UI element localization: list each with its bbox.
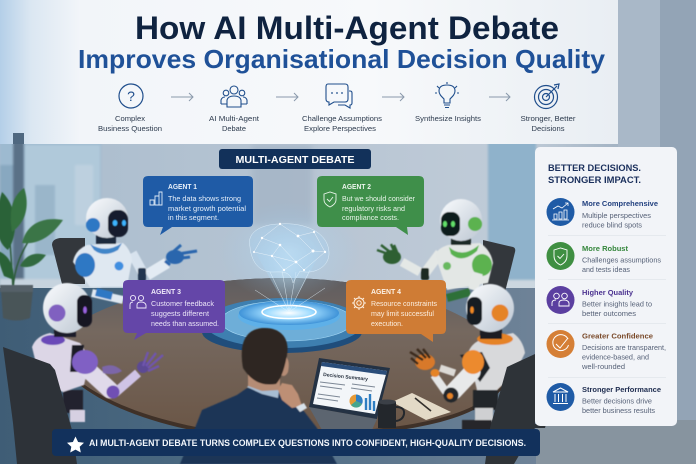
panel: better decisions bbox=[535, 147, 677, 426]
step 5: stronger decisions: Stronger, Better bbox=[520, 114, 576, 123]
callout: agent 4: Resource constraints bbox=[371, 299, 437, 308]
step 3: challenge assumptions bbox=[302, 84, 382, 133]
panel heading: BETTER DECISIONS. bbox=[548, 163, 641, 173]
projector disc bbox=[202, 298, 363, 353]
plant bbox=[0, 188, 63, 320]
callout: agent 1: market growth potential bbox=[168, 204, 246, 213]
step 2: multi-agent debate: AI Multi-Agent bbox=[209, 114, 260, 123]
callout: agent 2 bbox=[317, 176, 424, 235]
chair: agent 1 bbox=[52, 238, 85, 284]
icon: star bbox=[67, 436, 84, 452]
benefit: stronger performance bbox=[546, 383, 661, 415]
step 5: stronger decisions: Decisions bbox=[532, 124, 565, 133]
benefit: higher quality bbox=[546, 286, 652, 318]
robot: agent 1 blue bbox=[73, 198, 197, 300]
callout: agent 2: compliance costs. bbox=[342, 213, 399, 222]
benefit: more comprehensive: More Comprehensive bbox=[582, 199, 658, 208]
benefit: greater confidence: Decisions are transparent, bbox=[582, 343, 666, 352]
callout: agent 3: suggests different bbox=[151, 309, 210, 318]
hologram: brain and projector bbox=[202, 202, 363, 353]
callout: agent 2: But we should consider bbox=[342, 194, 415, 203]
step 4: synthesize insights: Synthesize Insights bbox=[415, 114, 481, 123]
laptop: decision summary bbox=[309, 358, 390, 430]
robot: agent 4 orange bbox=[410, 284, 525, 432]
step 4: synthesize insights bbox=[415, 82, 481, 123]
heading pill: multi-agent debate: MULTI-AGENT DEBATE bbox=[236, 154, 354, 166]
right wall bbox=[618, 0, 696, 464]
benefit: more robust: Challenges assumptions bbox=[582, 256, 661, 264]
notebook and pen bbox=[392, 393, 451, 420]
callout: agent 4: AGENT 4 bbox=[371, 287, 402, 296]
chair: agent 3 bbox=[3, 347, 77, 464]
benefit: more robust: and tests ideas bbox=[582, 265, 630, 274]
benefit: greater confidence: evidence-based, and bbox=[582, 352, 649, 362]
benefit: more comprehensive: Multiple perspectives bbox=[582, 211, 651, 220]
benefit: stronger performance: Stronger Performance bbox=[582, 385, 661, 394]
floor bbox=[0, 288, 540, 464]
left window bbox=[0, 130, 101, 290]
icon: people bbox=[130, 295, 146, 309]
callout: agent 4: may limit successful bbox=[371, 309, 434, 318]
step 1: complex business question: ? bbox=[127, 88, 135, 104]
callout: agent 1: The data shows strong bbox=[168, 194, 241, 203]
bottom banner bbox=[52, 429, 540, 456]
callout: agent 1 bbox=[143, 176, 253, 235]
step 2: multi-agent debate: Debate bbox=[222, 124, 246, 133]
benefit: higher quality: better outcomes bbox=[582, 309, 636, 318]
benefit: higher quality: Higher Quality bbox=[582, 288, 634, 297]
brain network bbox=[249, 223, 329, 283]
step 3: challenge assumptions: Explore Perspectives bbox=[304, 124, 376, 133]
step 1: complex business question: Complex bbox=[115, 114, 145, 123]
callout: agent 2: regulatory risks and bbox=[342, 204, 405, 213]
callout: agent 2: AGENT 2 bbox=[342, 182, 371, 191]
title: Improves Organisational Decision Quality bbox=[78, 44, 606, 74]
arrow 1 bbox=[171, 93, 193, 101]
benefit: greater confidence: well-rounded bbox=[581, 362, 625, 371]
benefit: greater confidence: Greater Confidence bbox=[582, 332, 653, 340]
callout: agent 4 bbox=[346, 280, 446, 342]
light beam bbox=[219, 202, 359, 312]
bottom banner: AI MULTI-AGENT DEBATE TURNS COMPLEX QUESTIONS INTO CONFIDENT, HIGH-QUALITY DECISIONS. bbox=[89, 438, 526, 449]
benefit: more robust: More Robust bbox=[582, 244, 628, 253]
step 3: challenge assumptions: Challenge Assumptions bbox=[302, 114, 382, 123]
coffee mug bbox=[378, 400, 404, 428]
chair: agent 2 bbox=[483, 240, 515, 292]
heading pill: multi-agent debate bbox=[219, 149, 371, 169]
step 1: complex business question: Business Question bbox=[98, 124, 162, 133]
benefit: higher quality: Better insights lead to bbox=[582, 300, 652, 308]
callout: agent 3: needs than assumed. bbox=[151, 319, 219, 328]
benefit: greater confidence bbox=[546, 330, 666, 371]
callout: agent 3: Customer feedback bbox=[151, 299, 214, 308]
benefit: more comprehensive: reduce blind spots bbox=[582, 220, 642, 230]
step 5: stronger decisions bbox=[520, 84, 576, 133]
icon: shield bbox=[324, 192, 336, 207]
right window bbox=[488, 140, 536, 292]
arrow 2 bbox=[276, 93, 298, 101]
table bbox=[50, 278, 512, 436]
benefit: more comprehensive bbox=[546, 198, 658, 230]
top header panel bbox=[0, 0, 618, 144]
robot: agent 2 green bbox=[377, 199, 493, 298]
process flow bbox=[98, 82, 576, 133]
callout: agent 3 bbox=[123, 280, 225, 340]
icon: bar chart bbox=[150, 192, 162, 205]
person from behind bbox=[180, 328, 337, 464]
callout: agent 4: execution. bbox=[371, 319, 403, 328]
centre window bbox=[252, 145, 312, 225]
step 1: complex business question bbox=[98, 84, 162, 133]
arrow 3 bbox=[382, 93, 404, 101]
chair: agent 4 bbox=[485, 354, 546, 464]
laptop: decision summary: Decision Summary bbox=[323, 372, 368, 383]
step 2: multi-agent debate bbox=[209, 86, 260, 133]
callout: agent 1: AGENT 1 bbox=[168, 182, 197, 191]
callout: agent 3: AGENT 3 bbox=[151, 287, 181, 296]
panel heading: STRONGER IMPACT. bbox=[548, 175, 641, 185]
benefit: stronger performance: better business results bbox=[582, 406, 655, 415]
panel heading bbox=[548, 163, 641, 185]
benefit: more robust bbox=[546, 242, 661, 274]
icon: gear bbox=[352, 296, 366, 310]
benefit: stronger performance: Better decisions drive bbox=[582, 396, 652, 406]
arrow 4 bbox=[489, 93, 510, 101]
title: How AI Multi-Agent Debate bbox=[135, 10, 559, 46]
robot: agent 3 purple bbox=[32, 283, 163, 422]
callout: agent 1: in this segment. bbox=[168, 213, 219, 222]
title bbox=[78, 10, 606, 74]
